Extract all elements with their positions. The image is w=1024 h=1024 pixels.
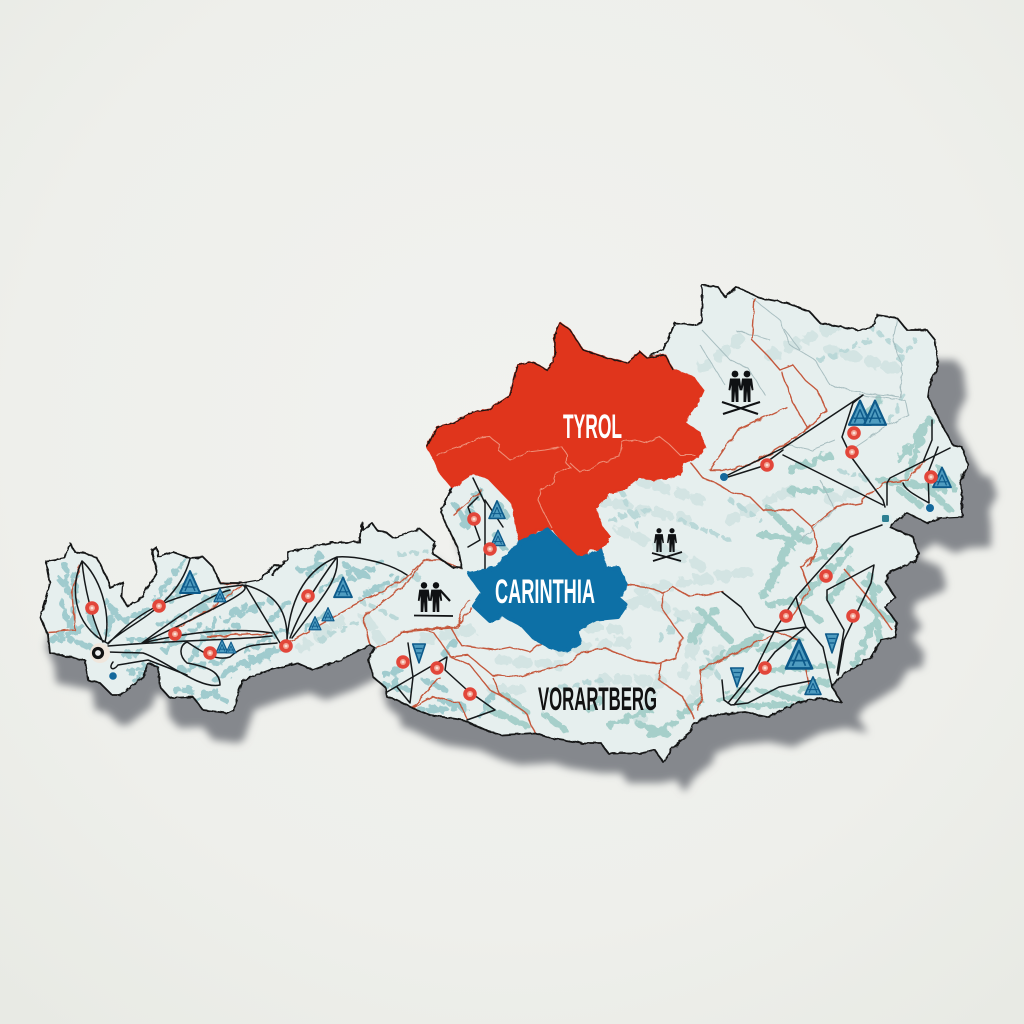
Carinthia label: CARINTHIA	[495, 573, 595, 611]
brown region boundary lines	[48, 298, 927, 733]
icon: skiers north-east	[722, 371, 760, 414]
icon: skiers west	[414, 582, 453, 616]
Tyrol northern edge	[427, 323, 673, 447]
terrain texture	[52, 310, 955, 735]
icon: skiers centre	[652, 528, 682, 561]
label: Vorarlberg text: VORARTBERG	[538, 681, 657, 717]
Tyrol shape	[427, 323, 705, 560]
region: Tyrol (red)	[427, 323, 705, 560]
thin river lines	[700, 298, 908, 540]
infographic canvas	[40, 284, 1001, 794]
black ski route lines	[75, 395, 950, 720]
Tyrol label: TYROL	[563, 408, 622, 446]
Carinthia shape	[469, 530, 626, 650]
map drop shadow	[46, 315, 997, 792]
map of Austria base	[40, 285, 968, 762]
mountain icons	[180, 401, 951, 694]
map outline	[40, 285, 968, 762]
Tyrol inner boundaries	[436, 437, 695, 528]
region: Carinthia (blue)	[469, 530, 626, 650]
hub markers	[90, 473, 934, 680]
location pins	[85, 426, 938, 701]
